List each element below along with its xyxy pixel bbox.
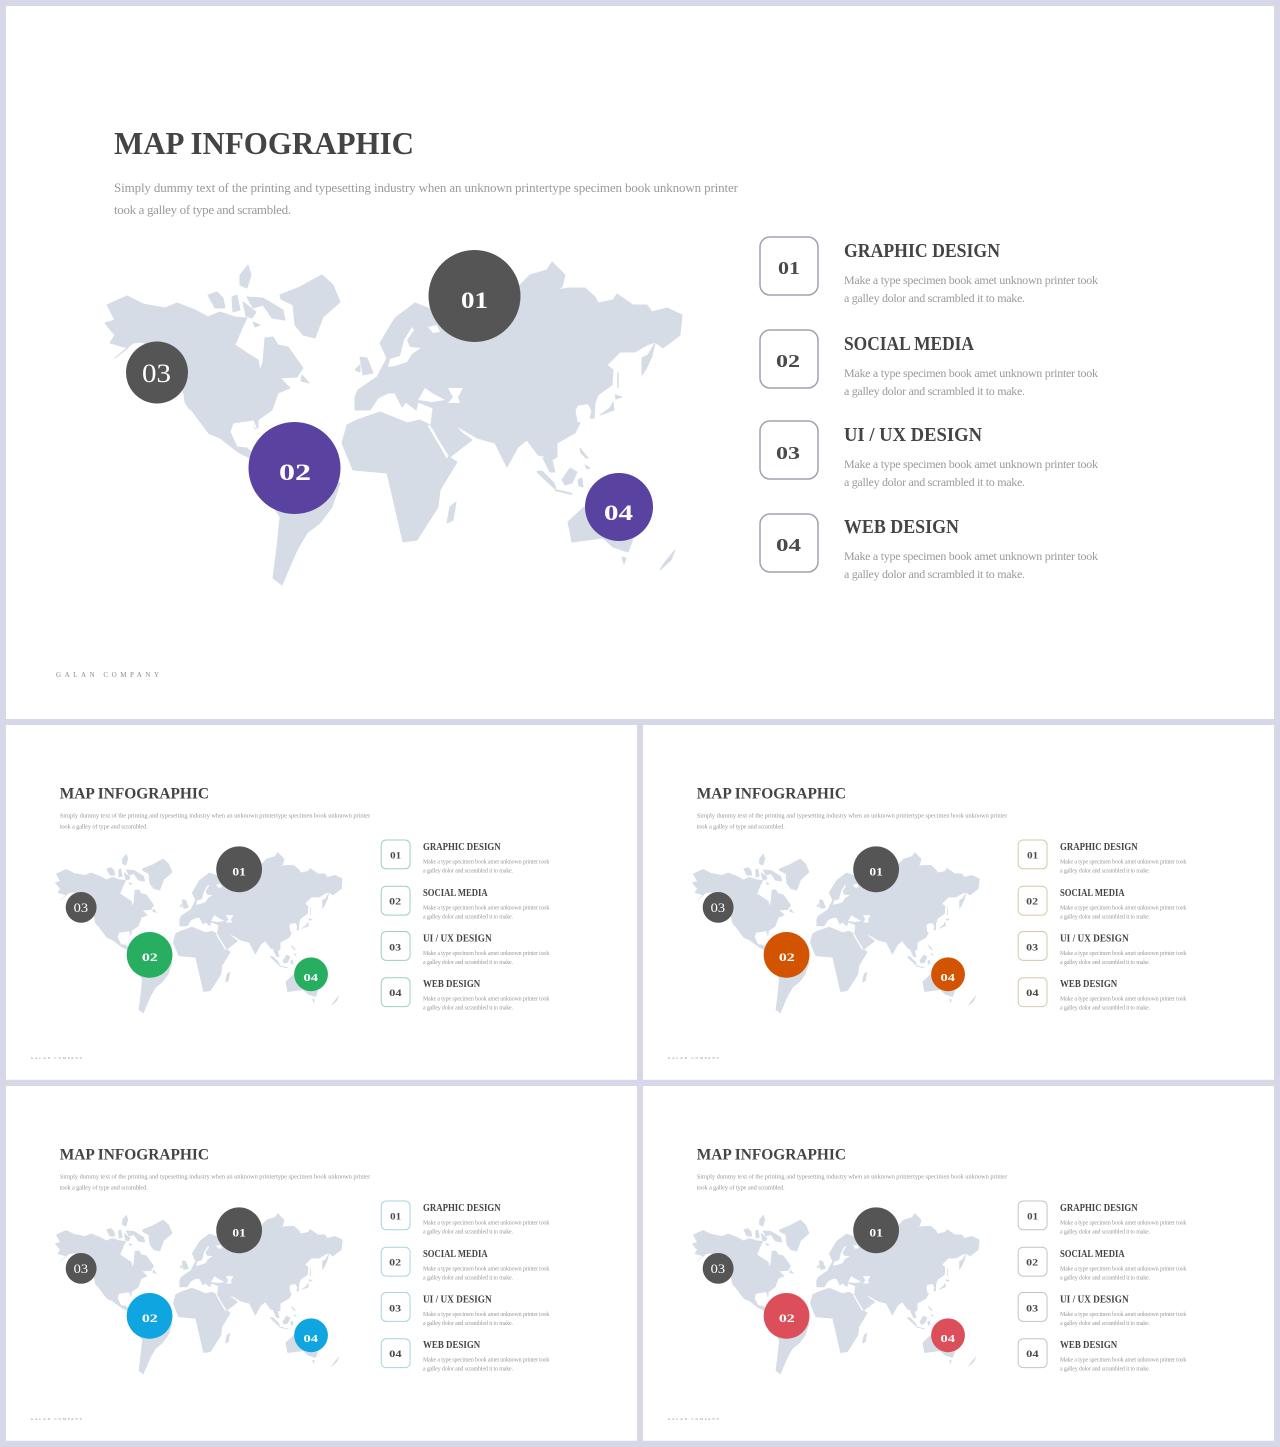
world map (55, 852, 342, 1013)
list item 02: 02 (389, 1258, 402, 1268)
title: MAP INFOGRAPHIC (114, 125, 414, 161)
panel: green slide (6, 725, 637, 1080)
list item 02: Make a type specimen book amet unknown printer took (423, 1267, 549, 1273)
list item 03: 03 (1026, 942, 1039, 952)
list item 01 (1018, 840, 1186, 874)
list item 01: 01 (390, 850, 401, 860)
list item 04: 04 (389, 1349, 402, 1359)
marker 03: 03 (74, 900, 88, 915)
list item 02: 02 (776, 351, 800, 371)
world map (105, 262, 682, 585)
marker 03 (126, 342, 188, 404)
list item 01 (381, 840, 549, 874)
marker 02: 02 (779, 1313, 795, 1325)
list item 02: a galley dolor and scrambled it to make. (423, 1276, 514, 1282)
world map (55, 1213, 342, 1374)
list item 01: 01 (1027, 1211, 1038, 1221)
marker 03 (66, 892, 97, 923)
list item 02 (1018, 886, 1186, 921)
list item 03: UI / UX DESIGN (1060, 1294, 1129, 1305)
intro text (60, 1174, 371, 1192)
list item 03: UI / UX DESIGN (844, 424, 983, 446)
list item 02: 02 (1026, 1258, 1039, 1268)
intro text: Simply dummy text of the printing and typesetting industry when an unknown printertype specimen book unknown printer (697, 1174, 1008, 1181)
list item 04: WEB DESIGN (423, 1340, 481, 1351)
intro text: took a galley of type and scrambled. (697, 824, 785, 831)
list item 03: 03 (1026, 1303, 1039, 1313)
marker 02 (764, 932, 809, 978)
list item 02: 02 (1026, 897, 1039, 907)
list item 02: Make a type specimen book amet unknown printer took (1060, 906, 1186, 912)
list item 03: UI / UX DESIGN (1060, 933, 1129, 944)
world map (692, 852, 979, 1013)
list item 02: SOCIAL MEDIA (423, 1249, 488, 1260)
list item 03 (381, 1293, 549, 1327)
marker 02: 02 (779, 952, 795, 964)
marker 02 (127, 1293, 172, 1339)
panel: orange slide (643, 725, 1274, 1080)
list item 03: a galley dolor and scrambled it to make. (844, 475, 1025, 489)
footer: GALAN COMPANY (56, 671, 159, 679)
list item 04: Make a type specimen book amet unknown printer took (423, 1358, 549, 1364)
list item 04: Make a type specimen book amet unknown printer took (423, 997, 549, 1003)
marker 01: 01 (232, 866, 246, 878)
list item 03 (760, 421, 1098, 489)
list item 02: 02 (389, 897, 402, 907)
intro text (697, 1174, 1008, 1192)
list item 01: GRAPHIC DESIGN (423, 842, 501, 853)
world map (692, 1213, 979, 1374)
intro text: took a galley of type and scrambled. (114, 202, 291, 217)
list item 02: SOCIAL MEDIA (423, 888, 488, 899)
list item 04: a galley dolor and scrambled it to make. (844, 567, 1025, 581)
list item 02: SOCIAL MEDIA (1060, 1249, 1125, 1260)
marker 01 (853, 846, 899, 892)
list item 04: Make a type specimen book amet unknown printer took (1060, 1358, 1186, 1364)
marker 04: 04 (941, 972, 956, 984)
intro text (60, 813, 371, 831)
marker 04: 04 (941, 1333, 956, 1345)
list item 03 (1018, 932, 1186, 966)
list item 01: GRAPHIC DESIGN (423, 1203, 501, 1214)
list item 04: Make a type specimen book amet unknown printer took (844, 549, 1098, 563)
list item 02: a galley dolor and scrambled it to make. (1060, 915, 1151, 921)
marker 03: 03 (142, 359, 171, 388)
marker 01 (428, 250, 520, 342)
marker 04 (294, 1318, 328, 1352)
marker 04 (931, 1318, 965, 1352)
panel: red slide (643, 1086, 1274, 1441)
marker 01: 01 (461, 288, 488, 313)
marker 04 (294, 957, 328, 991)
list item 03: UI / UX DESIGN (423, 933, 492, 944)
marker 04: 04 (304, 972, 319, 984)
list item 02: SOCIAL MEDIA (1060, 888, 1125, 899)
marker 04 (931, 957, 965, 991)
intro text (697, 813, 1008, 831)
list item 03 (1018, 1293, 1186, 1327)
list item 04 (760, 514, 1098, 581)
marker 01: 01 (869, 1227, 883, 1239)
list item 01 (1018, 1201, 1186, 1235)
list item 02: a galley dolor and scrambled it to make. (423, 915, 514, 921)
intro text: Simply dummy text of the printing and typesetting industry when an unknown printertype specimen book unknown printer (697, 813, 1008, 820)
title: MAP INFOGRAPHIC (60, 1147, 209, 1164)
footer: GALAN COMPANY (31, 1056, 83, 1060)
list item 02 (760, 330, 1098, 398)
list item 04: Make a type specimen book amet unknown printer took (1060, 997, 1186, 1003)
list item 04 (1018, 978, 1186, 1012)
title: MAP INFOGRAPHIC (697, 786, 846, 803)
panel: blue slide (6, 1086, 637, 1441)
list item 02: Make a type specimen book amet unknown printer took (844, 366, 1098, 380)
list item 01: a galley dolor and scrambled it to make. (423, 868, 514, 874)
marker 03 (66, 1253, 97, 1284)
list item 01: Make a type specimen book amet unknown printer took (423, 859, 549, 865)
list item 04: a galley dolor and scrambled it to make. (423, 1006, 514, 1012)
intro text (114, 180, 739, 217)
list item 01: a galley dolor and scrambled it to make. (1060, 868, 1151, 874)
list item 04: a galley dolor and scrambled it to make. (1060, 1006, 1151, 1012)
marker 03: 03 (711, 1261, 725, 1276)
list item 04: WEB DESIGN (1060, 1340, 1118, 1351)
list item 02 (381, 1247, 549, 1282)
intro text: Simply dummy text of the printing and typesetting industry when an unknown printertype specimen book unknown printer (60, 1174, 371, 1181)
list item 04: 04 (1026, 988, 1039, 998)
list item 03: a galley dolor and scrambled it to make. (423, 1321, 514, 1327)
marker 03 (703, 1253, 734, 1284)
list item 03: a galley dolor and scrambled it to make. (423, 960, 514, 966)
intro text: Simply dummy text of the printing and typesetting industry when an unknown printertype specimen book unknown printer (60, 813, 371, 820)
list item 01: Make a type specimen book amet unknown printer took (1060, 859, 1186, 865)
list item 01: a galley dolor and scrambled it to make. (844, 291, 1025, 305)
list item 01: GRAPHIC DESIGN (1060, 1203, 1138, 1214)
marker 03 (703, 892, 734, 923)
marker 01 (216, 846, 262, 892)
marker 01 (216, 1207, 262, 1253)
list item 01: 01 (390, 1211, 401, 1221)
list item 02: a galley dolor and scrambled it to make. (1060, 1276, 1151, 1282)
list item 02: SOCIAL MEDIA (844, 333, 974, 355)
list item 01: Make a type specimen book amet unknown printer took (423, 1220, 549, 1226)
intro text: Simply dummy text of the printing and typesetting industry when an unknown printertype specimen book unknown printer (114, 180, 739, 195)
marker 04 (585, 473, 653, 541)
marker 02 (764, 1293, 809, 1339)
list item 04 (1018, 1339, 1186, 1373)
list item 01: a galley dolor and scrambled it to make. (1060, 1229, 1151, 1235)
marker 04: 04 (604, 500, 633, 525)
list item 01: Make a type specimen book amet unknown printer took (1060, 1220, 1186, 1226)
list item 01 (760, 237, 1098, 305)
marker 03: 03 (74, 1261, 88, 1276)
list item 03: 03 (389, 942, 402, 952)
list item 03: Make a type specimen book amet unknown printer took (844, 457, 1098, 471)
footer: GALAN COMPANY (31, 1417, 83, 1421)
marker 01: 01 (869, 866, 883, 878)
marker 02 (248, 422, 340, 514)
marker 04: 04 (304, 1333, 319, 1345)
marker 02: 02 (142, 1313, 158, 1325)
list item 02: Make a type specimen book amet unknown printer took (1060, 1267, 1186, 1273)
list item 04: WEB DESIGN (1060, 979, 1118, 990)
list item 02: Make a type specimen book amet unknown printer took (423, 906, 549, 912)
list item 03: Make a type specimen book amet unknown printer took (1060, 951, 1186, 957)
list item 01: Make a type specimen book amet unknown printer took (844, 273, 1098, 287)
intro text: took a galley of type and scrambled. (697, 1185, 785, 1192)
list item 04: a galley dolor and scrambled it to make. (1060, 1367, 1151, 1373)
marker 02: 02 (279, 460, 311, 485)
list item 03: Make a type specimen book amet unknown printer took (423, 951, 549, 957)
list item 01: 01 (778, 258, 800, 278)
marker 03: 03 (711, 900, 725, 915)
list item 04: 04 (1026, 1349, 1039, 1359)
list item 01: GRAPHIC DESIGN (1060, 842, 1138, 853)
list item 03: 03 (776, 443, 800, 463)
list item 03 (381, 932, 549, 966)
list item 01: 01 (1027, 850, 1038, 860)
marker 02 (127, 932, 172, 978)
list item 04: 04 (776, 535, 801, 555)
marker 01: 01 (232, 1227, 246, 1239)
list item 04: 04 (389, 988, 402, 998)
list item 04: WEB DESIGN (423, 979, 481, 990)
list item 04: WEB DESIGN (844, 516, 959, 538)
list item 03: a galley dolor and scrambled it to make. (1060, 960, 1151, 966)
footer: GALAN COMPANY (668, 1056, 720, 1060)
list item 03: 03 (389, 1303, 402, 1313)
list item 01 (381, 1201, 549, 1235)
footer: GALAN COMPANY (668, 1417, 720, 1421)
list item 03: Make a type specimen book amet unknown printer took (423, 1312, 549, 1318)
title: MAP INFOGRAPHIC (697, 1147, 846, 1164)
panel: main slide purple (6, 6, 1274, 719)
list item 03: UI / UX DESIGN (423, 1294, 492, 1305)
list item 04 (381, 1339, 549, 1373)
list item 04 (381, 978, 549, 1012)
list item 01: GRAPHIC DESIGN (844, 240, 1000, 262)
marker 01 (853, 1207, 899, 1253)
list item 02 (381, 886, 549, 921)
list item 02: a galley dolor and scrambled it to make. (844, 384, 1025, 398)
intro text: took a galley of type and scrambled. (60, 1185, 148, 1192)
list item 04: a galley dolor and scrambled it to make. (423, 1367, 514, 1373)
list item 01: a galley dolor and scrambled it to make. (423, 1229, 514, 1235)
title: MAP INFOGRAPHIC (60, 786, 209, 803)
list item 02 (1018, 1247, 1186, 1282)
list item 03: a galley dolor and scrambled it to make. (1060, 1321, 1151, 1327)
intro text: took a galley of type and scrambled. (60, 824, 148, 831)
list item 03: Make a type specimen book amet unknown printer took (1060, 1312, 1186, 1318)
marker 02: 02 (142, 952, 158, 964)
